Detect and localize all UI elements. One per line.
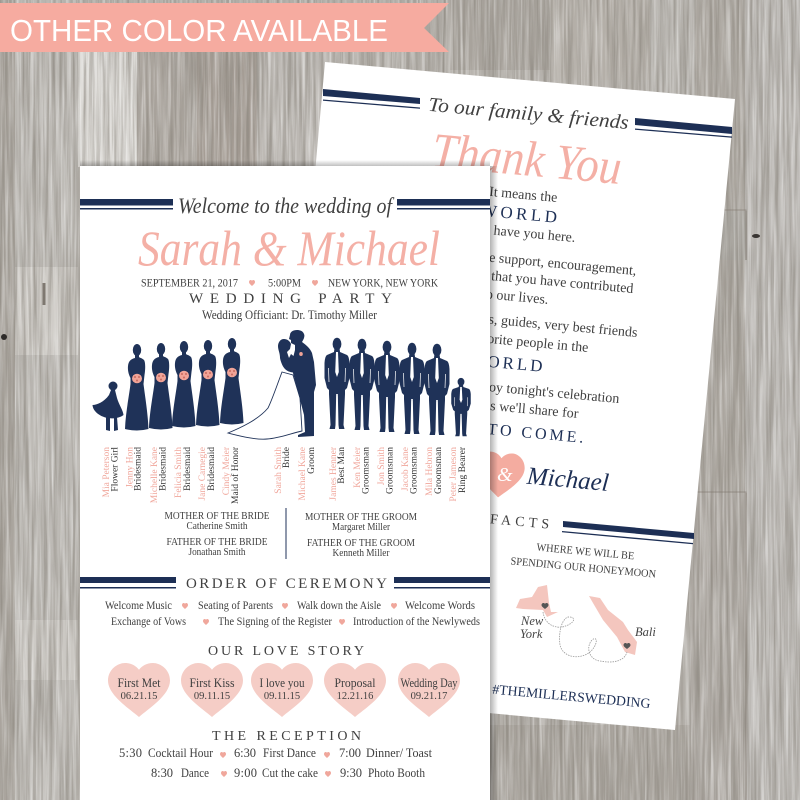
wedding party name labels: Ring Bearer	[458, 446, 468, 493]
honeymoon caption: SPENDING OUR HONEYMOON	[510, 555, 657, 581]
love story hearts: 12.21.16	[337, 691, 373, 702]
back card heading: To our family & friends	[427, 94, 630, 134]
reception schedule: 9:30	[340, 766, 362, 780]
honeymoon caption	[510, 542, 657, 581]
dotted flight path	[543, 612, 627, 662]
map: New York	[516, 585, 558, 641]
signature heart	[474, 450, 526, 500]
silhouette: ring bearer	[451, 378, 471, 436]
thank you message: Enjoy tonight's celebration	[469, 378, 620, 407]
thank you message: Our mentors, guides, very best friends	[423, 307, 638, 341]
wedding party name labels: Jane Carnegie	[198, 447, 208, 501]
wedding party name labels: Michael Kane	[298, 447, 308, 501]
ceremony stripes	[80, 577, 490, 588]
heading: facts: FUN FACTS	[441, 508, 554, 533]
thank you message: to have you here.	[479, 222, 576, 246]
wedding party name labels: Jenny Hon	[126, 447, 136, 488]
wedding party name labels: Maid of Honor	[230, 446, 241, 504]
welcome heading: Welcome to the wedding of	[178, 193, 395, 218]
reception schedule: 7:00	[339, 746, 361, 760]
wedding party name labels: Peter Jameson	[449, 447, 459, 502]
wedding party name labels: Bride	[282, 447, 292, 468]
love story hearts: Wedding Day	[400, 675, 458, 690]
ceremony items	[105, 600, 480, 628]
wedding party name labels: Mia Peterson	[102, 447, 112, 497]
wedding party name labels: Groom	[307, 446, 317, 474]
header stripes	[80, 199, 490, 210]
reception schedule: Dinner/ Toast	[366, 746, 433, 760]
map: New York: New	[520, 614, 544, 628]
wedding party name labels: Flower Girl	[110, 447, 120, 492]
parents of the groom: Margaret Miller	[332, 521, 390, 533]
reception schedule: Photo Booth	[368, 766, 426, 780]
wedding party name labels: Groomsman	[410, 447, 420, 494]
reception schedule: Cut the cake	[262, 766, 318, 780]
ceremony items: Welcome Music	[105, 600, 172, 612]
date, time, location: NEW YORK, NEW YORK	[328, 278, 439, 290]
love story hearts	[108, 663, 460, 717]
date, time, location: SEPTEMBER 21, 2017	[141, 278, 238, 290]
map: Bali: Bali	[635, 625, 656, 639]
wedding party name labels: Groomsman	[362, 447, 372, 494]
parents of the bride	[164, 510, 270, 558]
wedding party name labels: Best Man	[337, 447, 347, 484]
silhouette: groomsmen	[324, 338, 450, 435]
date, time, location	[141, 278, 439, 290]
heading: our love story: OUR LOVE STORY	[208, 644, 364, 659]
facts stripes	[562, 521, 694, 544]
ceremony items: The Signing of the Register	[218, 616, 332, 628]
thank you script title: Thank You	[430, 122, 624, 195]
signature: Michael: Michael	[525, 463, 610, 497]
parents of the groom: MOTHER OF THE GROOM	[305, 511, 417, 523]
love story hearts: Proposal	[334, 675, 376, 690]
officiant: Wedding Officiant: Dr. Timothy Miller	[202, 308, 378, 322]
panel: wedding program card (front)	[80, 160, 498, 800]
reception schedule: Dance	[181, 766, 209, 780]
wedding party name labels: Michelle Kane	[150, 447, 160, 503]
signature heart: &	[497, 464, 513, 486]
thank you message: to our lives.	[481, 287, 549, 308]
wedding party name labels: Ken Meier	[353, 446, 363, 488]
wedding party name labels: Cindy Meier	[222, 446, 232, 495]
wedding party name labels: Sarah Smith	[274, 447, 284, 494]
love story hearts: 09.11.15	[264, 691, 300, 702]
parents of the groom: FATHER OF THE GROOM	[307, 537, 415, 549]
parents of the bride: FATHER OF THE BRIDE	[166, 536, 268, 548]
ceremony items: Seating of Parents	[198, 600, 273, 612]
wedding party name labels	[102, 446, 468, 504]
thank you message: WORLD	[468, 350, 546, 376]
heading: the reception: THE RECEPTION	[212, 729, 361, 744]
honeymoon caption: WHERE WE WILL BE	[536, 542, 635, 562]
love story hearts: 09.21.17	[411, 691, 447, 702]
parents of the bride: MOTHER OF THE BRIDE	[164, 510, 270, 522]
reception schedule: 6:30	[234, 746, 256, 760]
banner: other color available: OTHER COLOR AVAILABLE	[10, 13, 388, 48]
thank you message: and laughter that you have contributed	[418, 262, 634, 297]
wedding party name labels: Felicia Smith	[174, 447, 184, 498]
map: New York: York	[520, 627, 543, 641]
reception schedule: 9:00	[234, 766, 257, 780]
silhouette: flower girl	[92, 382, 124, 431]
parents of the bride: Catherine Smith	[186, 520, 248, 532]
wedding party name labels: Bridesmaid	[183, 447, 193, 491]
date, time, location: 5:00PM	[268, 278, 301, 290]
thank you message: For the support, encouragement,	[455, 248, 637, 279]
hashtag: SHARE USING #THEMILLERSWEDDING	[398, 673, 651, 711]
wedding party name labels: Groomsman	[434, 447, 444, 494]
thank you message: and times we'll share for	[441, 395, 579, 422]
ceremony items: Introduction of the Newlyweds	[353, 616, 480, 628]
reception schedule: First Dance	[263, 746, 316, 760]
love story hearts: 09.11.15	[194, 691, 230, 702]
thank you message	[413, 185, 638, 447]
banner: other color available	[0, 3, 449, 52]
reception schedule	[119, 746, 433, 780]
wedding party name labels: Bridesmaid	[134, 447, 144, 491]
wedding party name labels: Bridesmaid	[158, 447, 168, 491]
love story hearts: First Kiss	[190, 675, 234, 690]
wedding party name labels: Jon Smith	[377, 447, 387, 485]
wedding party name labels: Groomsman	[386, 447, 396, 494]
wedding party name labels: Bridesmaid	[207, 447, 217, 491]
wedding party name labels: James Henner	[329, 446, 339, 501]
silhouette: bridesmaids	[125, 338, 244, 430]
couple names: Sarah & Michael	[138, 220, 440, 276]
parents of the bride: Jonathan Smith	[188, 546, 246, 558]
thank you message: YEARS TO COME.	[413, 414, 587, 447]
thank you message: It means the	[488, 185, 558, 206]
thank you message: WORLD	[480, 201, 561, 227]
ceremony items: Welcome Words	[405, 600, 475, 612]
reception schedule: Cocktail Hour	[148, 746, 214, 760]
wedding party name labels: Jacob Kane	[401, 447, 411, 491]
back card header stripes	[323, 89, 732, 138]
wedding party name labels: Mila Hebron	[425, 447, 435, 496]
love story hearts: I love you	[260, 675, 305, 690]
reception schedule: 8:30	[151, 766, 173, 780]
heading: wedding party: WEDDING PARTY	[189, 291, 392, 307]
ceremony items: Walk down the Aisle	[297, 600, 381, 612]
ceremony items: Exchange of Vows	[111, 616, 186, 628]
panel: thank you card (back)	[268, 62, 735, 730]
heading: order of ceremony: ORDER OF CEREMONY	[186, 576, 387, 592]
reception schedule: 5:30	[119, 746, 142, 760]
parents of the groom: Kenneth Miller	[332, 547, 390, 559]
map: Bali	[589, 596, 656, 655]
love story hearts: First Met	[118, 675, 161, 690]
silhouette: bride and groom	[228, 330, 316, 439]
parents of the groom	[305, 511, 417, 559]
thank you message: and favorite people in the	[445, 328, 589, 356]
love story hearts: 06.21.15	[121, 691, 157, 702]
